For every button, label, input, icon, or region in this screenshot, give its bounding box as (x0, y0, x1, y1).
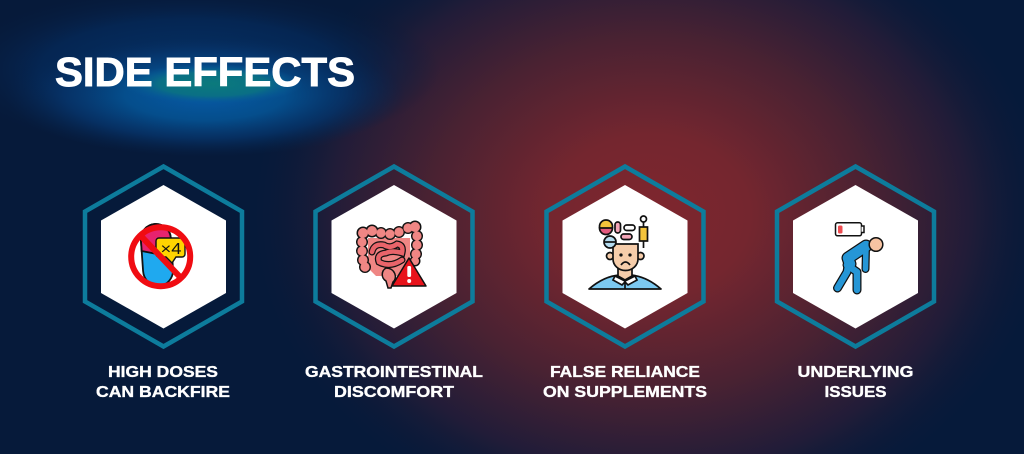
label (96, 364, 230, 401)
icon: crossed-out capsule (131, 223, 190, 287)
label: DISCOMFORT (334, 384, 454, 401)
label: ON SUPPLEMENTS (543, 384, 707, 401)
panel: underlying issues (777, 166, 934, 401)
label (798, 364, 914, 401)
label: CAN BACKFIRE (96, 384, 230, 401)
label: GASTROINTESTINAL (305, 364, 483, 381)
title: SIDE EFFECTS (55, 49, 355, 95)
icon: tired person with low battery (836, 223, 883, 290)
label (543, 364, 707, 401)
hexagon panel (793, 185, 918, 328)
label: ISSUES (824, 384, 887, 401)
hexagon frame (777, 166, 934, 346)
label (305, 364, 483, 401)
hexagon frame (546, 166, 704, 346)
icon: crossed-out capsule: ×4 (160, 241, 182, 258)
label: HIGH DOSES (108, 364, 218, 381)
hexagon frame (85, 166, 242, 346)
hexagon frame (316, 166, 472, 346)
hexagon panel (101, 185, 226, 328)
label: UNDERLYING (798, 364, 914, 381)
panel: high doses can backfire (85, 166, 242, 401)
hexagon panel (562, 185, 688, 328)
panel: gastrointestinal discomfort (305, 166, 483, 401)
label: FALSE RELIANCE (550, 364, 700, 381)
icon: intestines with warning (356, 220, 426, 288)
panel: false reliance on supplements (543, 166, 707, 401)
icon: worried man with pills (589, 216, 661, 289)
hexagon panel (332, 185, 456, 328)
